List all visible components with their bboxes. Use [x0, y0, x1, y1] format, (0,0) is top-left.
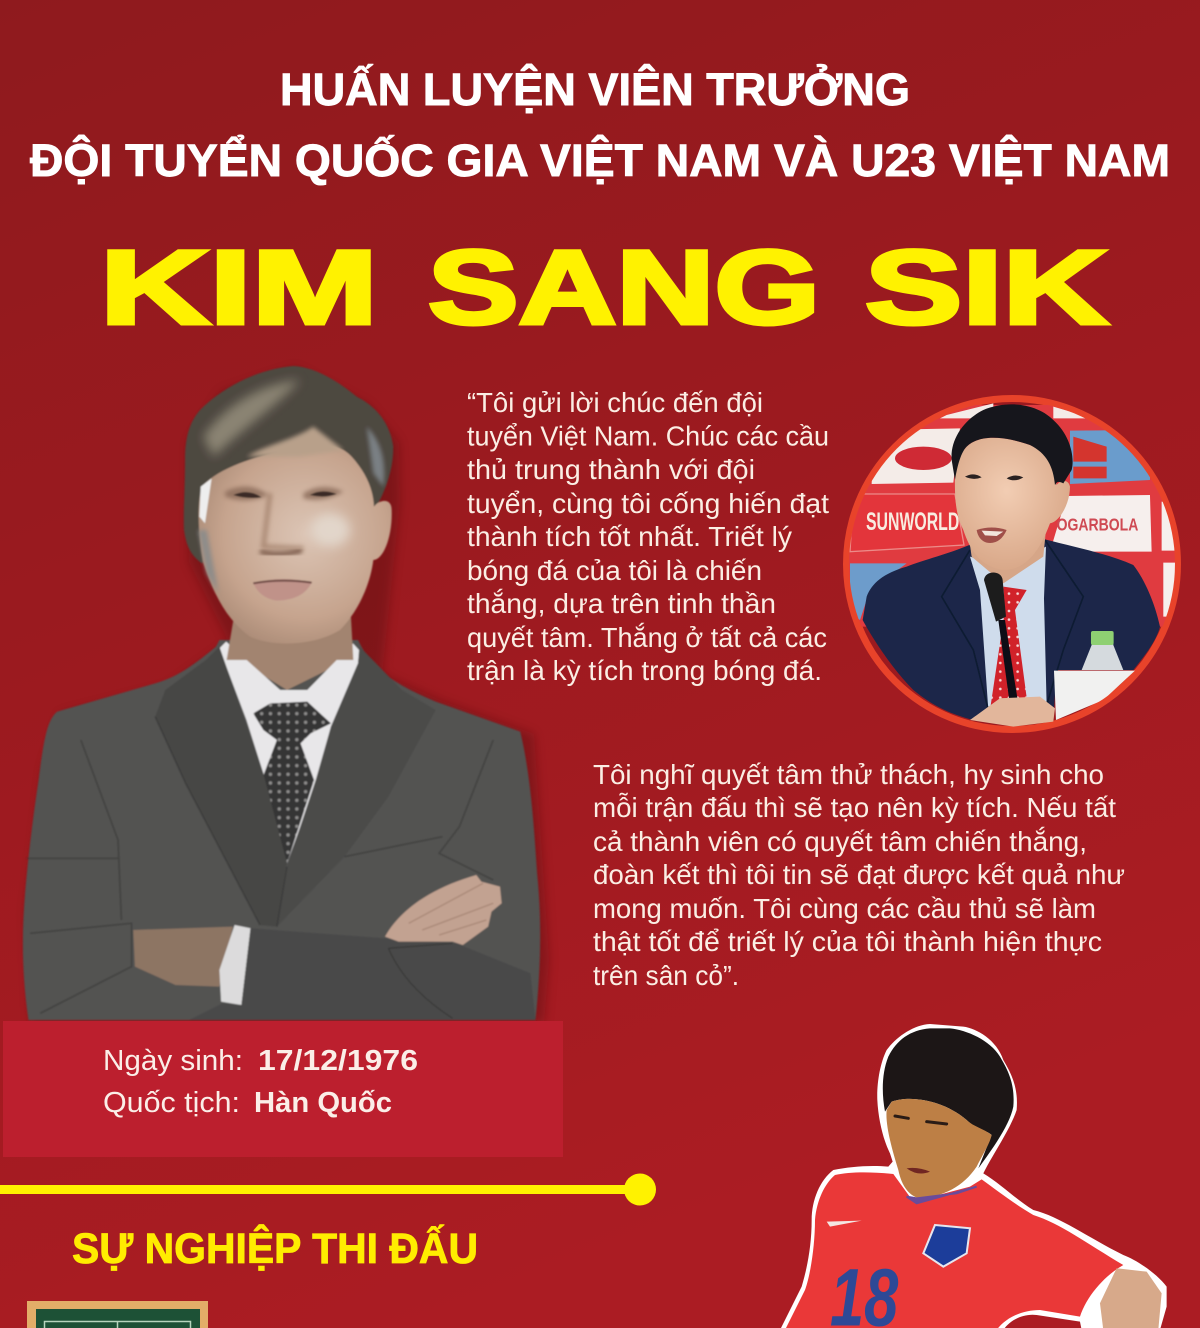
face	[199, 445, 392, 643]
main portrait	[23, 366, 549, 1023]
microphone	[984, 572, 1006, 622]
neck	[226, 616, 354, 661]
portrait shadow	[26, 368, 549, 1023]
info box: birth date and nationality: 17/12/1976	[258, 1045, 418, 1077]
circular press conference photo	[840, 398, 1185, 730]
eyes	[233, 491, 337, 498]
circular press conference photo: SUNWORLD	[866, 508, 959, 536]
circular press conference photo: OGARBOLA	[1057, 515, 1138, 535]
info box: birth date and nationality: Ngày sinh:	[103, 1045, 243, 1077]
quote part 2: mỗi trận đấu thì sẽ tạo nên kỳ tích. Nếu tất	[593, 792, 1116, 823]
info box: birth date and nationality: Quốc tịch:	[103, 1087, 240, 1119]
section heading: SỰ NGHIỆP THI ĐẤU	[72, 1224, 478, 1273]
name heading: KIM	[100, 230, 378, 346]
collar	[907, 1187, 977, 1203]
face	[886, 1099, 992, 1198]
quote part 1: tuyển Việt Nam. Chúc các cầu	[467, 420, 829, 452]
quote part 1: quyết tâm. Thắng ở tất cả các	[467, 622, 827, 653]
forehead highlight	[199, 478, 212, 523]
quote part 1: tuyển, cùng tôi cống hiến đạt	[467, 488, 829, 519]
cuff	[219, 925, 251, 1005]
name heading	[100, 230, 1108, 346]
quote part 1: thủ trung thành với đội	[467, 454, 755, 485]
name plate	[1054, 671, 1135, 720]
quote part 2: mong muốn. Tôi cùng các cầu thủ sẽ làm	[593, 893, 1096, 924]
red jersey	[785, 1172, 1123, 1328]
title	[30, 64, 1170, 186]
red tie	[990, 587, 1028, 710]
name heading: SANG	[428, 230, 820, 346]
face	[955, 438, 1070, 570]
mouth	[253, 579, 312, 601]
name heading: SIK	[865, 230, 1108, 346]
quote part 2: đoàn kết thì tôi tin sẽ đạt được kết quả như	[593, 859, 1125, 890]
quote part 1: bóng đá của tôi là chiến	[467, 555, 762, 586]
info box: birth date and nationality	[3, 1021, 563, 1157]
tie	[253, 702, 331, 863]
head	[184, 366, 393, 660]
team crest	[923, 1225, 970, 1267]
hair	[883, 1028, 1014, 1168]
neck	[970, 534, 1046, 584]
hair highlights	[203, 380, 300, 457]
quote part 1: “Tôi gửi lời chúc đến đội	[467, 387, 763, 418]
wrist	[133, 927, 233, 987]
title: ĐỘI TUYỂN QUỐC GIA VIỆT NAM VÀ U23 VIỆT NAM	[30, 135, 1170, 186]
nose	[263, 493, 303, 548]
right lapel	[299, 652, 390, 834]
navy suit	[863, 539, 1160, 720]
quote part 2	[593, 759, 1125, 991]
info box: birth date and nationality: Hàn Quốc	[254, 1087, 392, 1119]
fringe	[247, 427, 343, 457]
bottle	[1082, 632, 1123, 670]
quote part 1	[467, 387, 829, 686]
suit and shirt	[23, 640, 540, 1020]
sponsor backdrop	[840, 405, 1185, 627]
quote part 1: trận là kỳ tích trong bóng đá.	[467, 655, 822, 686]
shirt	[970, 547, 1047, 710]
hand	[385, 875, 502, 945]
suit creases	[27, 717, 493, 1013]
yellow timeline divider	[0, 1174, 656, 1206]
neck	[247, 660, 336, 690]
cheek highlight	[310, 513, 350, 547]
quote part 1: thắng, dựa trên tinh thần	[467, 588, 776, 619]
quote part 2: cả thành viên có quyết tâm chiến thắng,	[593, 826, 1087, 857]
quote part 2: Tôi nghĩ quyết tâm thử thách, hy sinh cho	[593, 759, 1104, 790]
left lapel	[155, 647, 287, 927]
eyes and mouth	[965, 474, 1023, 480]
title: HUẤN LUYỆN VIÊN TRƯỞNG	[280, 64, 910, 115]
forearm	[1100, 1268, 1162, 1328]
shirt collar	[219, 642, 359, 863]
nike tick	[827, 1221, 862, 1227]
quote part 2: trên sân cỏ”.	[593, 960, 739, 991]
white cutout outline	[780, 1024, 1167, 1328]
eyes and mouth	[895, 1116, 947, 1124]
upper forearm sleeve	[189, 928, 535, 1020]
hair	[184, 366, 393, 563]
quote part 1: thành tích tốt nhất. Triết lý	[467, 521, 792, 552]
eye shadows	[225, 487, 343, 500]
hands	[970, 697, 1055, 727]
quote part 2: thật tốt để triết lý của tôi thành hiện thực	[593, 926, 1102, 957]
player photo in red jersey	[780, 1024, 1167, 1328]
hair	[952, 404, 1073, 485]
icon: tactics chalkboard	[27, 1301, 208, 1328]
lapel lines	[942, 540, 1083, 710]
